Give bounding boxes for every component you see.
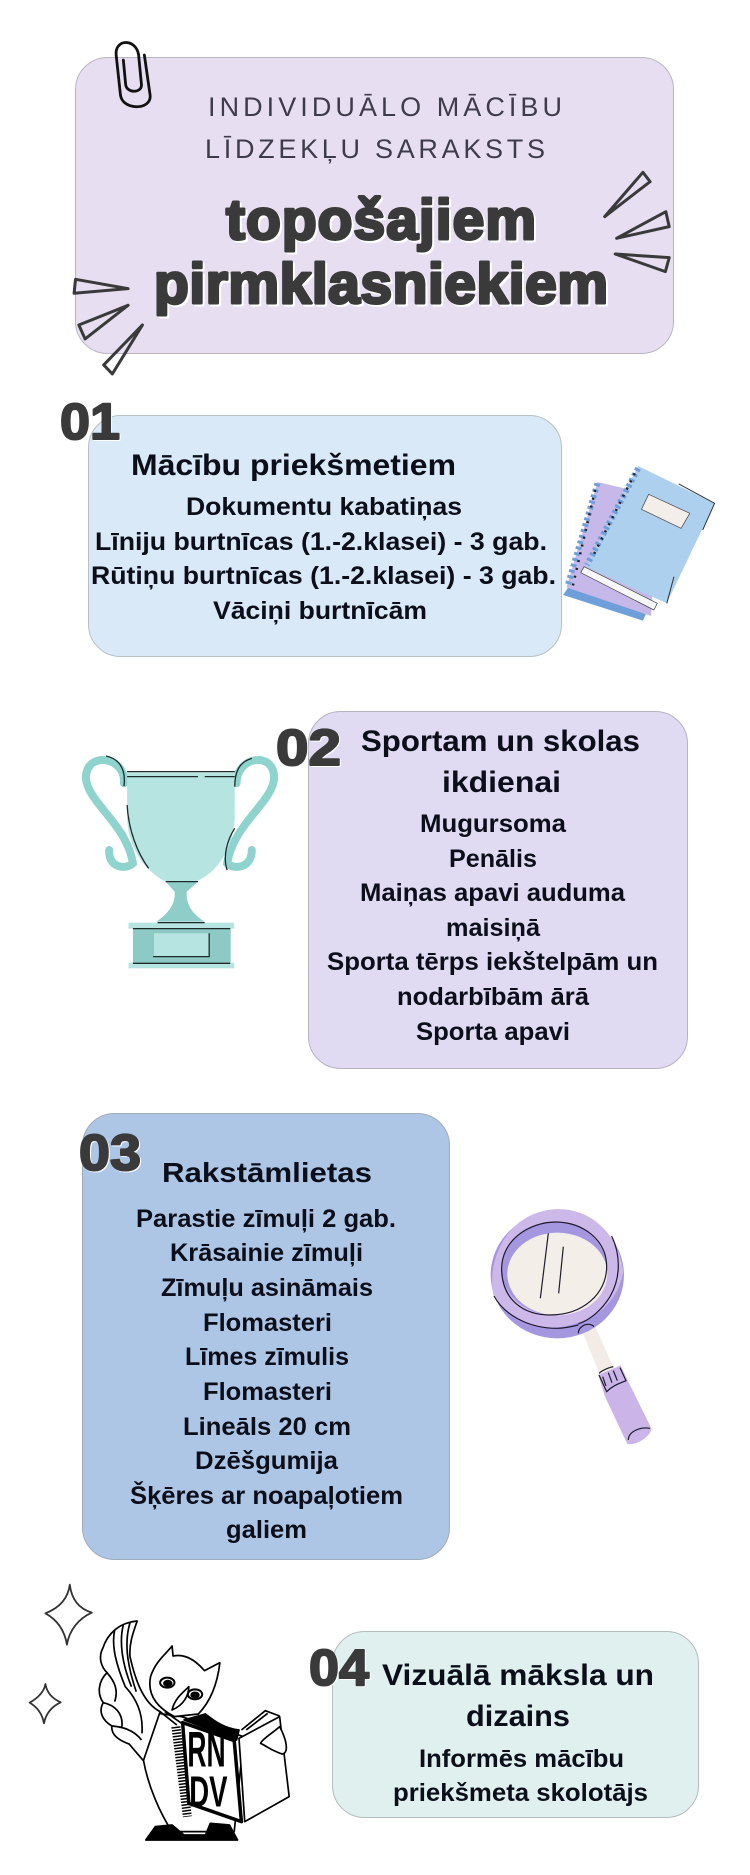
number 01: 01 [60, 393, 120, 450]
heading: section 2: Sportam un skolas [361, 725, 640, 758]
list: section 4 items: priekšmeta skolotājs [393, 1779, 648, 1807]
title subtitle [205, 92, 562, 164]
list: section 3 items: Zīmuļu asināmais [161, 1274, 373, 1302]
number 04: 04 [309, 1639, 370, 1696]
heading: section 4: dizains [466, 1700, 570, 1733]
icon: paperclip [116, 42, 150, 107]
list: section 3 items: Šķēres ar noapaļotiem [130, 1480, 403, 1510]
list: section 2 items: Maiņas apavi auduma [360, 879, 626, 907]
list: section 1 items [91, 493, 556, 625]
list: section 3 items: Līmes zīmulis [185, 1343, 349, 1371]
title subtitle: LĪDZEKĻU SARAKSTS [205, 134, 545, 164]
icon: notebooks [563, 466, 715, 621]
heading: section 4: Vizuālā māksla un [382, 1659, 654, 1692]
list: section 2 items: Penālis [449, 845, 537, 873]
icon: magnifying glass [491, 1209, 651, 1444]
icon: owl reading a book: RN [187, 1722, 226, 1778]
icon: large star [45, 1585, 92, 1645]
list: section 3 items: Parastie zīmuļi 2 gab. [136, 1205, 396, 1233]
icon: burst lines [74, 172, 669, 374]
list: section 3 items: Flomasteri [203, 1309, 332, 1337]
list: section 2 items [327, 810, 658, 1046]
heading: section 2 [361, 725, 640, 799]
list: section 1 items: Vāciņi burtnīcām [213, 597, 427, 625]
title main text: pirmklasniekiem [154, 252, 608, 316]
heading: section 4 [382, 1659, 654, 1733]
icon: trophy [86, 756, 274, 968]
heading: section 2: ikdienai [442, 766, 561, 799]
list: section 3 items: Flomasteri [203, 1378, 332, 1406]
list: section 2 items: nodarbībām ārā [397, 983, 590, 1011]
list: section 3 items: Krāsainie zīmuļi [170, 1239, 363, 1267]
title main text: topošajiem [226, 188, 536, 252]
number 03: 03 [79, 1124, 141, 1181]
list: section 2 items: Mugursoma [420, 810, 567, 838]
list: section 4 items [393, 1745, 648, 1807]
title subtitle: INDIVIDUĀLO MĀCĪBU [208, 92, 562, 122]
panel: section 1 [88, 416, 562, 656]
title main text [154, 188, 608, 316]
panel: section 4 [332, 1632, 698, 1818]
list: section 1 items: Līniju burtnīcas (1.-2.klasei) - 3 gab. [95, 528, 547, 556]
list: section 3 items [130, 1205, 403, 1544]
list: section 3 items: Dzēšgumija [195, 1447, 339, 1475]
number 02: 02 [276, 719, 341, 776]
list: section 2 items: maisiņā [446, 914, 541, 942]
list: section 1 items: Dokumentu kabatiņas [186, 493, 462, 521]
panel: title header [76, 58, 674, 354]
panel: section 3 [82, 1114, 450, 1560]
heading: section 3: Rakstāmlietas [162, 1157, 372, 1188]
icon: owl reading a book: DV [189, 1769, 228, 1816]
list: section 4 items: Informēs mācību [419, 1745, 624, 1773]
icon: owl reading a book [99, 1621, 289, 1840]
heading: section 1: Mācību priekšmetiem [131, 449, 456, 482]
list: section 1 items: Rūtiņu burtnīcas (1.-2.klasei) - 3 gab. [91, 562, 556, 590]
panel: section 2 [308, 712, 688, 1068]
list: section 3 items: galiem [226, 1516, 307, 1544]
list: section 3 items: Lineāls 20 cm [183, 1413, 351, 1441]
list: section 2 items: Sporta apavi [416, 1018, 570, 1046]
list: section 2 items: Sporta tērps iekštelpām un [327, 948, 658, 976]
icon: small star [30, 1684, 61, 1723]
